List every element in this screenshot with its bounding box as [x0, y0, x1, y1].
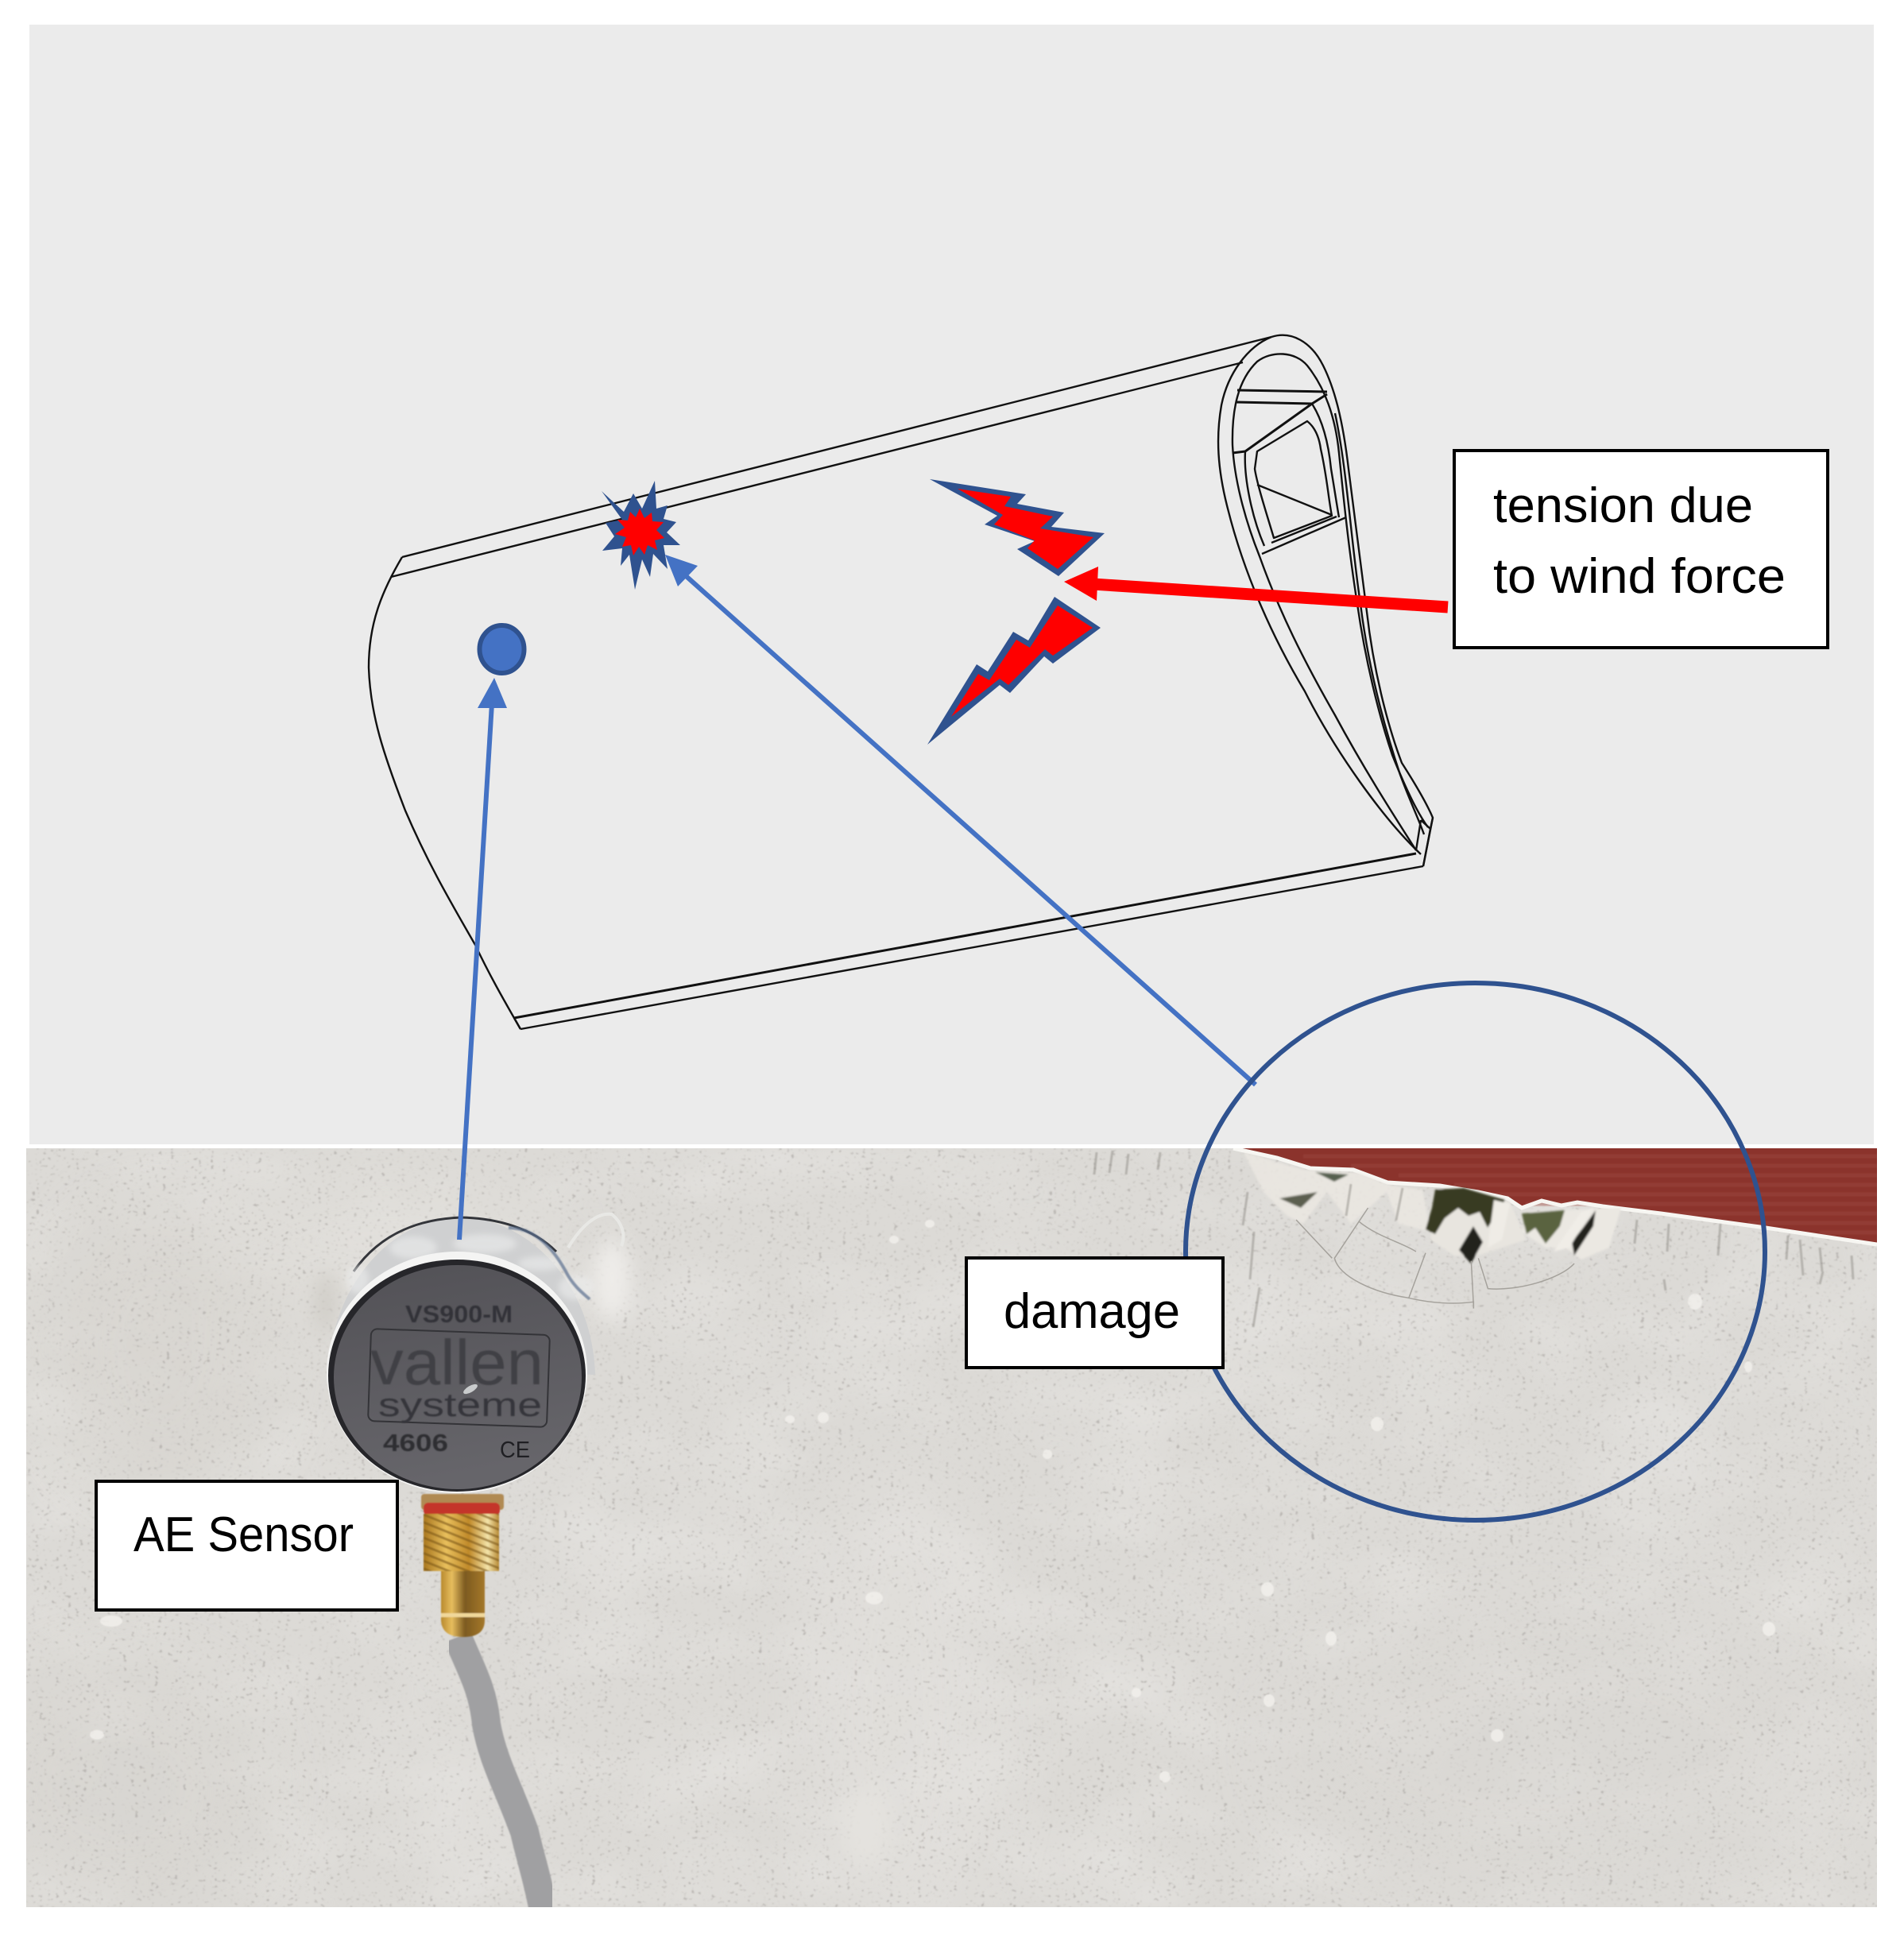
callout ring: damage detail	[1186, 983, 1765, 1520]
arrow: damage to burst	[665, 555, 1256, 1085]
icon: upper tension bolt	[930, 479, 1105, 576]
blade outline	[369, 335, 1433, 1029]
icon: AE sensor body: systeme	[378, 1386, 542, 1423]
callout: tension due to wind force: to wind force	[1493, 549, 1786, 604]
callout: damage: damage	[1004, 1284, 1180, 1339]
icon: AE sensor body: CE	[500, 1438, 530, 1463]
icon: AE sensor location dot	[480, 625, 524, 673]
callout: AE Sensor: AE Sensor	[134, 1507, 354, 1562]
sensor face	[327, 1252, 587, 1493]
icon: AE sensor body: VS900-M	[405, 1300, 513, 1328]
photo: red wall behind the damaged edge	[1233, 1148, 1877, 1244]
arrow: wind force	[1064, 567, 1448, 607]
callout: tension due to wind force: tension due	[1493, 478, 1753, 533]
callout: AE Sensor	[96, 1481, 397, 1610]
callout: tension due to wind force	[1454, 451, 1828, 648]
photo: glue residue around the sensor	[316, 1240, 890, 1867]
icon: AE sensor body	[327, 1214, 623, 1493]
photo: water droplets on the concrete	[90, 1220, 1775, 1782]
arrow: AE sensor to dot	[459, 678, 507, 1240]
icon: lower tension bolt	[927, 597, 1101, 745]
icon: AE sensor body: vallen	[370, 1327, 544, 1398]
callout: damage	[966, 1258, 1223, 1368]
icon: gold connector	[421, 1494, 504, 1637]
panel: concrete blade photograph	[0, 1148, 1877, 1935]
icon: damage burst marker	[602, 481, 680, 590]
icon: AE sensor cable	[458, 1637, 544, 1911]
photo: broken edge of the damage	[1094, 1151, 1853, 1327]
icon: AE sensor body: 4606	[383, 1429, 448, 1457]
blade cross-section profile	[1218, 335, 1433, 866]
panel: blade diagram background	[29, 25, 1874, 1144]
